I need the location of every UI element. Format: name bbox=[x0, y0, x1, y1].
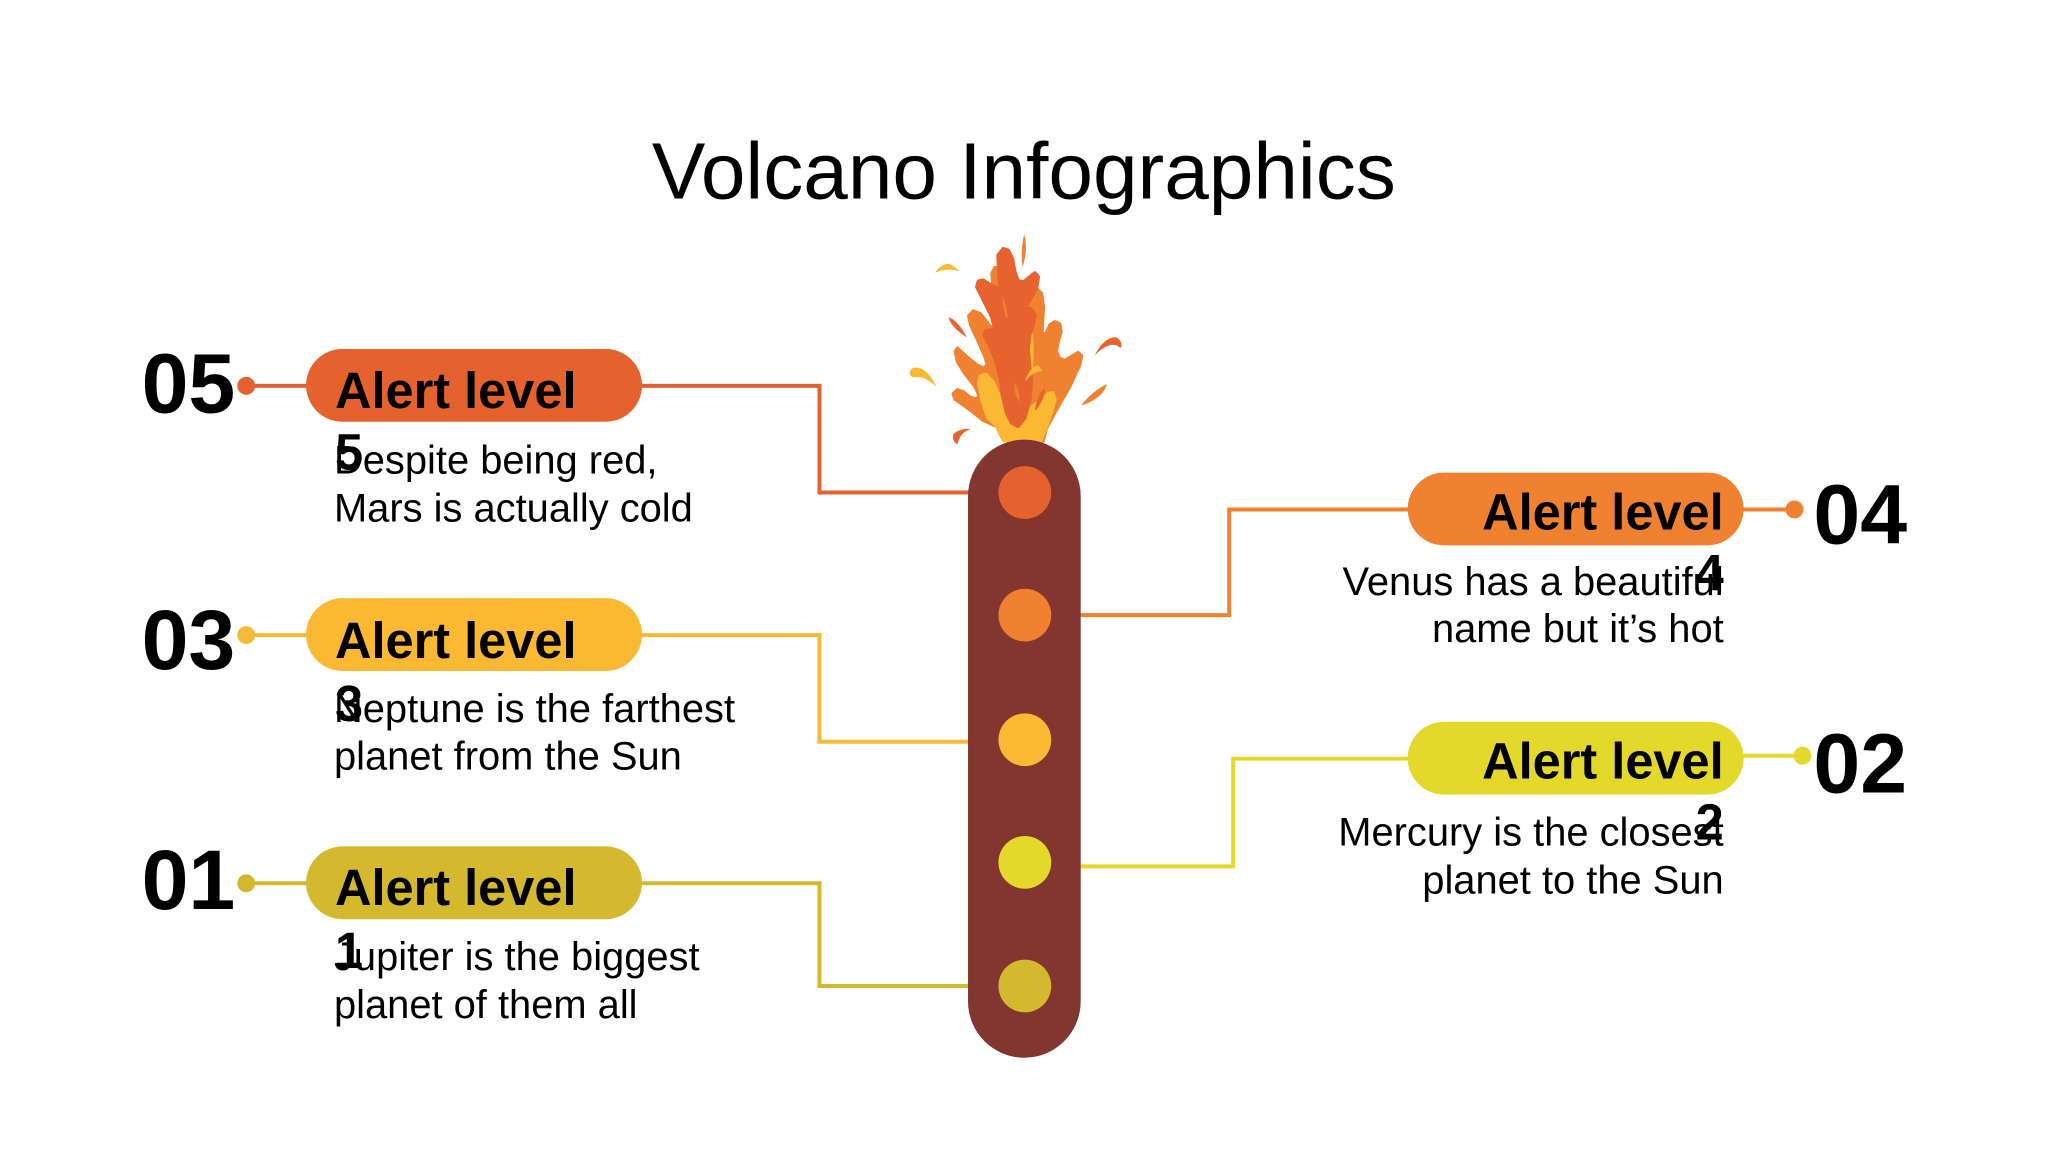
marker dot bbox=[1739, 507, 1794, 511]
number 01: 01 bbox=[142, 833, 235, 927]
column dot 4 bbox=[998, 589, 1051, 642]
description: planet to the Sun bbox=[1422, 858, 1724, 902]
pill heading: Alert level bbox=[1482, 483, 1724, 540]
pill bbox=[1408, 473, 1744, 545]
column dot 5 bbox=[998, 466, 1051, 519]
pill heading: Alert level bbox=[335, 612, 577, 669]
connector: level 3 bbox=[640, 635, 970, 742]
pill heading: Alert level bbox=[1482, 733, 1724, 790]
description: Neptune is the farthest bbox=[334, 687, 735, 731]
connector: level 4 bbox=[1079, 509, 1411, 615]
connector: level 1 bbox=[640, 883, 970, 986]
panel: alert level 2 bbox=[1338, 717, 1907, 902]
pill bbox=[306, 598, 642, 671]
description: planet from the Sun bbox=[334, 735, 682, 779]
volcano column bbox=[968, 440, 1081, 1058]
description: Despite being red, bbox=[334, 439, 657, 483]
panel: alert level 1 bbox=[142, 833, 700, 1027]
connector: level 2 bbox=[1079, 759, 1411, 866]
panel: alert level 3 bbox=[142, 593, 735, 779]
description: Mars is actually cold bbox=[334, 486, 693, 530]
pill bbox=[306, 846, 642, 919]
sparks are part of the flame bbox=[910, 234, 1121, 444]
wrapped heading digit: 5 bbox=[335, 424, 363, 481]
number 03: 03 bbox=[142, 593, 235, 687]
marker dot bbox=[246, 881, 309, 885]
column dot 3 bbox=[998, 713, 1051, 766]
panel: alert level 4 bbox=[1343, 467, 1907, 651]
description: Venus has a beautiful bbox=[1343, 560, 1724, 604]
column dot 2 bbox=[998, 836, 1051, 889]
column dot 1 bbox=[998, 960, 1051, 1012]
pill bbox=[1408, 722, 1744, 795]
marker dot bbox=[246, 633, 309, 637]
wrapped heading digit: 4 bbox=[1696, 544, 1724, 601]
description: Jupiter is the biggest bbox=[334, 935, 700, 979]
wrapped heading digit: 1 bbox=[335, 922, 363, 979]
connector: level 5 bbox=[640, 386, 970, 493]
number 04: 04 bbox=[1813, 467, 1907, 561]
wrapped heading digit: 2 bbox=[1696, 793, 1724, 850]
number 05: 05 bbox=[142, 337, 235, 431]
description: Mercury is the closest bbox=[1338, 810, 1724, 854]
description: planet of them all bbox=[334, 983, 638, 1027]
number 02: 02 bbox=[1813, 717, 1907, 811]
marker dot bbox=[246, 384, 309, 388]
pill bbox=[306, 349, 642, 422]
icon: volcano flame bbox=[910, 234, 1121, 444]
wrapped heading digit: 3 bbox=[335, 675, 363, 732]
pill heading: Alert level bbox=[335, 859, 577, 916]
panel: alert level 5 bbox=[142, 337, 693, 530]
pill heading: Alert level bbox=[335, 362, 577, 419]
marker dot bbox=[1739, 754, 1802, 758]
description: name but it’s hot bbox=[1432, 607, 1724, 651]
title: Volcano Infographics bbox=[652, 125, 1396, 215]
